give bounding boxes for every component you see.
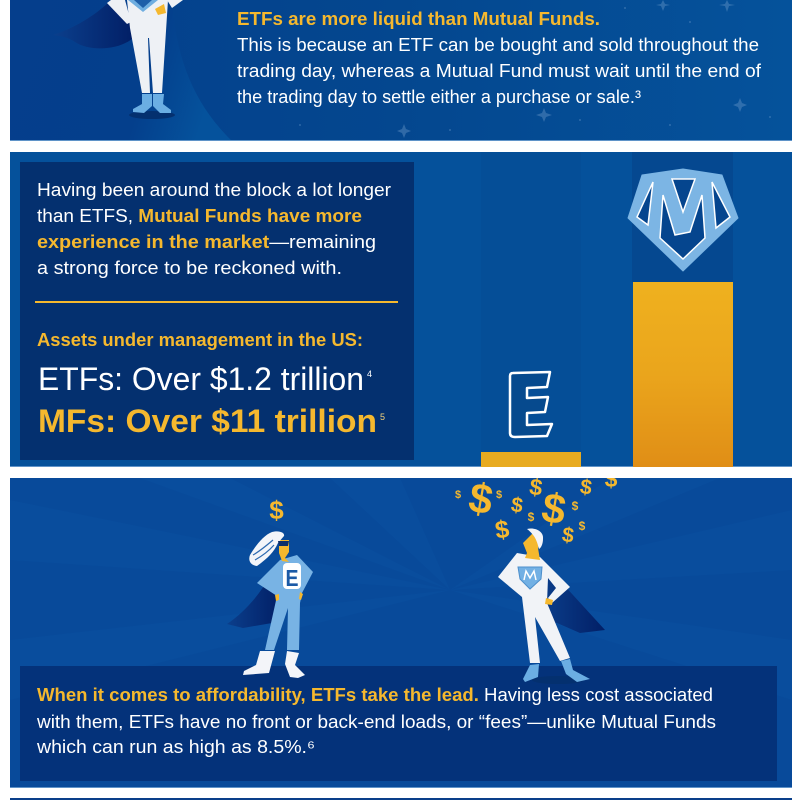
- text block: affordability: When it comes to affordability, ETFs take the lead. Having less cost associated: [37, 685, 713, 705]
- icon: falling dollars: $: [561, 523, 576, 548]
- icon: falling dollars: $: [572, 499, 579, 513]
- text panel: affordability: [20, 666, 777, 781]
- icon: ETF heroine: [227, 495, 313, 678]
- icon: falling dollars: $: [493, 515, 511, 545]
- icon: falling dollars: $: [528, 510, 535, 524]
- icon: falling dollars: $: [528, 473, 544, 501]
- bar: Mutual Funds: [633, 282, 733, 467]
- text block: liquidity: the trading day to settle either a purchase or sale.³: [237, 87, 641, 107]
- icon: Mutual Fund hero legs and cape: [53, 0, 183, 119]
- text block: affordability: with them, ETFs have no front or back-end loads, or “fees”—unlike Mutual Funds: [36, 712, 716, 732]
- label: E: E: [286, 565, 298, 591]
- text panel: experience: [20, 162, 414, 460]
- icon: falling dollars: $: [455, 489, 461, 501]
- icon: background stars: [299, 0, 771, 138]
- icon: falling dollars: $: [510, 493, 525, 518]
- stat: Mutual Fund assets: 5: [380, 412, 385, 422]
- icon: falling dollars: $: [465, 473, 496, 524]
- icon: Mutual Fund hero: [455, 466, 618, 684]
- bar chart: [481, 169, 738, 467]
- stat: Mutual Fund assets: MFs: Over $11 trillion: [38, 403, 377, 439]
- panel: next section edge: [10, 798, 792, 800]
- text block: experience: a strong force to be reckoned with.: [37, 258, 342, 278]
- text block: affordability: which can run as high as 8.5%.⁶: [36, 737, 315, 757]
- icon: falling dollars: $: [496, 489, 502, 501]
- stat: ETF assets: 4: [367, 369, 372, 379]
- decorative rays: [10, 478, 792, 700]
- icon: single dollar: $: [269, 495, 284, 525]
- text block: liquidity: trading day, whereas a Mutual Fund must wait until the end of: [237, 61, 762, 81]
- text block: experience: [37, 180, 391, 278]
- icon: falling dollars: $: [605, 466, 618, 492]
- icon: E emblem: [510, 372, 552, 437]
- bar: ETFs: [481, 452, 581, 467]
- icon: falling dollars: $: [538, 483, 569, 534]
- heading: assets: Assets under management in the US:: [37, 330, 363, 350]
- icon: falling dollars: [455, 478, 618, 544]
- heading: liquidity: ETFs are more liquid than Mutual Funds.: [237, 9, 600, 29]
- text block: liquidity: [237, 35, 762, 107]
- panel: liquidity: [10, 0, 792, 141]
- text block: experience: experience in the market —remaining: [37, 232, 376, 252]
- panel: assets under management: [10, 152, 792, 467]
- icon: falling dollars: $: [579, 475, 594, 500]
- icon: falling dollars: $: [579, 519, 586, 533]
- text block: experience: Having been around the block a lot longer: [37, 180, 391, 200]
- panel: affordability: [10, 466, 792, 788]
- text block: liquidity: This is because an ETF can be bought and sold throughout the: [237, 35, 759, 55]
- stat: ETF assets: ETFs: Over $1.2 trillion: [38, 361, 364, 397]
- icon: M shield emblem: [628, 169, 738, 271]
- text block: affordability: [36, 685, 716, 757]
- text block: experience: than ETFS, Mutual Funds have more: [37, 206, 362, 226]
